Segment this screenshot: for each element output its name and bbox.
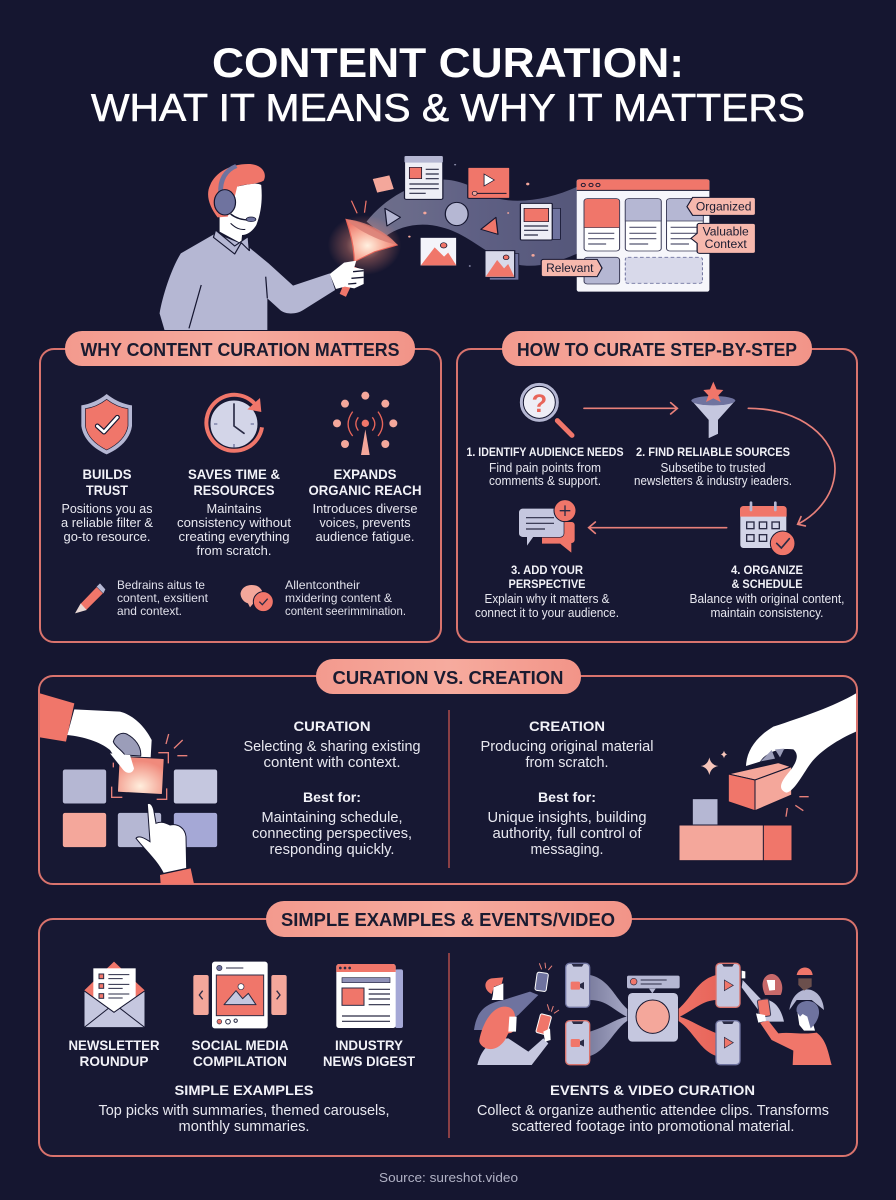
step 4 text: Balance with original content, <box>690 592 844 606</box>
example labels: SOCIAL MEDIA <box>192 1037 288 1053</box>
illustration: events and video curation <box>474 963 832 1065</box>
label: Relevant <box>541 259 602 277</box>
small note right <box>285 578 406 618</box>
icon: social media carousel <box>193 962 287 1028</box>
events text: Collect & organize authentic attendee clips. Transforms <box>477 1103 829 1119</box>
data stream swoosh <box>367 180 578 266</box>
step 4 text: maintain consistency. <box>710 606 824 620</box>
column: expands reach: audience fatigue. <box>316 529 414 544</box>
label: Relevant: Relevant <box>546 261 594 275</box>
panel: simple examples and events <box>39 901 857 1156</box>
example labels: ROUNDUP <box>80 1053 148 1069</box>
column: saves time <box>177 466 291 558</box>
label: Organized: Organized <box>696 200 751 213</box>
title: WHAT IT MEANS & WHY IT MATTERS <box>91 87 805 130</box>
illustration: creation blocks and hand <box>679 693 856 861</box>
flow ribbons <box>590 975 717 1056</box>
arrow: step 1 to 2 <box>584 403 677 414</box>
events text: scattered footage into promotional material. <box>512 1119 794 1135</box>
creation text: Producing original material <box>480 739 654 755</box>
lavender triangle <box>385 208 400 226</box>
icon: newsletter envelope <box>84 962 145 1028</box>
curation text: connecting perspectives, <box>252 826 412 842</box>
step 4 text: & SCHEDULE <box>732 577 802 591</box>
step 4 text <box>690 563 844 620</box>
small note left: Bedrains aitus te <box>117 578 205 592</box>
small note left: content, exsitient <box>117 591 209 605</box>
curation text: Best for: <box>303 789 361 805</box>
heading pill: WHY CONTENT CURATION MATTERS <box>80 340 400 360</box>
creation text: Best for: <box>538 789 596 805</box>
right attendees <box>742 967 832 1065</box>
column: saves time: from scratch. <box>196 543 272 558</box>
simple examples text: SIMPLE EXAMPLES <box>174 1082 314 1098</box>
heading pill <box>316 659 581 694</box>
icon: magnifier <box>519 382 572 435</box>
step 1 text: Find pain points from <box>489 461 601 475</box>
events text <box>477 1082 829 1135</box>
central curation hub <box>627 975 680 1042</box>
example labels: INDUSTRY <box>335 1037 404 1053</box>
curation text <box>244 718 420 858</box>
lavender circle <box>445 202 468 226</box>
small note left <box>117 578 209 618</box>
panel: curation vs creation <box>39 659 857 884</box>
step 4 text: 4. ORGANIZE <box>731 563 803 577</box>
column: builds trust: TRUST <box>86 482 128 498</box>
floating square <box>372 175 394 193</box>
step 3 text <box>475 563 619 620</box>
column: builds trust: go-to resource. <box>64 529 150 544</box>
hand holding funnel <box>330 261 364 297</box>
step 3 text: Explain why it matters & <box>484 592 610 606</box>
source phones <box>566 963 590 1065</box>
events text: EVENTS & VIDEO CURATION <box>550 1082 755 1098</box>
small note left: and context. <box>117 604 182 618</box>
curation text: Maintaining schedule, <box>262 810 402 826</box>
column: saves time: consistency without <box>177 515 291 530</box>
label: Organized <box>687 197 756 215</box>
icon: funnel with star <box>691 382 736 439</box>
step 2 text <box>634 445 792 488</box>
heading pill <box>502 331 812 366</box>
newspaper card <box>520 203 560 240</box>
small note right: mxidering content & <box>285 591 392 605</box>
creation text: from scratch. <box>526 755 608 771</box>
step 1 text: comments & support. <box>489 474 601 488</box>
column: saves time: SAVES TIME & <box>188 466 280 482</box>
example labels: COMPILATION <box>193 1053 287 1069</box>
title <box>91 39 805 130</box>
creation text: CREATION <box>529 718 605 734</box>
panel: how to curate <box>457 331 857 642</box>
label: Valuable Context <box>691 223 756 253</box>
coral triangle <box>481 217 498 234</box>
label: Valuable Context: Valuable <box>703 225 749 238</box>
image card stack <box>485 251 519 280</box>
creation text <box>480 718 654 858</box>
icon: pencil <box>75 583 105 613</box>
column: expands reach: Introduces diverse <box>312 501 418 516</box>
column: saves time: creating everything <box>178 529 290 544</box>
heading pill <box>65 331 415 366</box>
curated browser window <box>577 179 709 292</box>
column: builds trust <box>61 466 153 544</box>
step 1 text: 1. IDENTIFY AUDIENCE NEEDS <box>466 445 624 459</box>
small note right: Allentcontheir <box>285 578 360 592</box>
icon: shield <box>81 394 132 454</box>
step 2 text: newsletters & industry ieaders. <box>634 474 792 488</box>
column: expands reach <box>308 466 422 544</box>
article card <box>404 156 443 199</box>
icon: clock <box>206 395 262 451</box>
simple examples text: monthly summaries. <box>178 1119 310 1135</box>
video card <box>468 167 510 198</box>
example labels <box>68 1037 415 1069</box>
curation text: responding quickly. <box>270 842 394 858</box>
icon: magnifier: ? <box>532 390 547 418</box>
step 3 text: PERSPECTIVE <box>508 577 586 591</box>
column: expands reach: voices, prevents <box>320 515 411 530</box>
column: saves time: RESOURCES <box>194 482 274 498</box>
heading pill: SIMPLE EXAMPLES & EVENTS/VIDEO <box>281 910 615 930</box>
creation text: messaging. <box>530 842 604 858</box>
title: CONTENT CURATION: <box>212 39 684 86</box>
image card <box>420 237 457 266</box>
output phones <box>716 963 740 1065</box>
heading pill <box>266 901 632 937</box>
step 1 text <box>466 445 624 488</box>
arrow: step 2 to 4 <box>748 408 835 526</box>
simple examples text <box>98 1082 390 1135</box>
curation text: Selecting & sharing existing <box>244 739 420 755</box>
person <box>160 164 335 330</box>
step 2 text: 2. FIND RELIABLE SOURCES <box>636 445 790 459</box>
creation text: Unique insights, building <box>488 810 646 826</box>
simple examples text: Top picks with summaries, themed carousels, <box>98 1103 390 1119</box>
heading pill: HOW TO CURATE STEP-BY-STEP <box>517 340 797 360</box>
panel: why content curation matters <box>40 331 441 642</box>
curation text: content with context. <box>264 755 400 771</box>
column: builds trust: Positions you as <box>62 501 153 516</box>
small note right: content seerimmination. <box>285 604 406 618</box>
icon: news digest <box>336 964 403 1028</box>
left attendees <box>474 963 559 1065</box>
label: Valuable Context: Context <box>705 237 747 251</box>
example icons <box>84 962 403 1028</box>
step 3 text: 3. ADD YOUR <box>511 563 583 577</box>
step 2 text: Subsetibe to trusted <box>660 461 766 475</box>
arrow: step 4 to 3 <box>589 522 727 533</box>
step icons and arrows <box>519 382 835 556</box>
glowing funnel <box>328 201 401 275</box>
step 3 text: connect it to your audience. <box>475 606 619 620</box>
creation text: authority, full control of <box>492 826 642 842</box>
column: expands reach: ORGANIC REACH <box>308 482 422 498</box>
column: builds trust: a reliable filter & <box>61 515 153 530</box>
heading pill: CURATION VS. CREATION <box>332 668 564 688</box>
sparkle dots <box>408 164 535 267</box>
icons <box>75 392 397 613</box>
example labels: NEWSLETTER <box>68 1037 160 1053</box>
icon: calendar <box>740 503 795 556</box>
source note: Source: sureshot.video <box>379 1170 518 1185</box>
icon: organic reach <box>333 392 397 455</box>
icon: speech bubbles with plus <box>519 500 576 553</box>
column: saves time: Maintains <box>206 501 262 516</box>
column: expands reach: EXPANDS <box>334 466 396 482</box>
illustration: curation hands and tiles <box>40 693 218 884</box>
curation text: CURATION <box>294 718 370 734</box>
hero illustration <box>160 156 756 330</box>
column: builds trust: BUILDS <box>82 466 132 482</box>
icon: chat bubbles <box>241 585 273 612</box>
example labels: NEWS DIGEST <box>323 1053 415 1069</box>
